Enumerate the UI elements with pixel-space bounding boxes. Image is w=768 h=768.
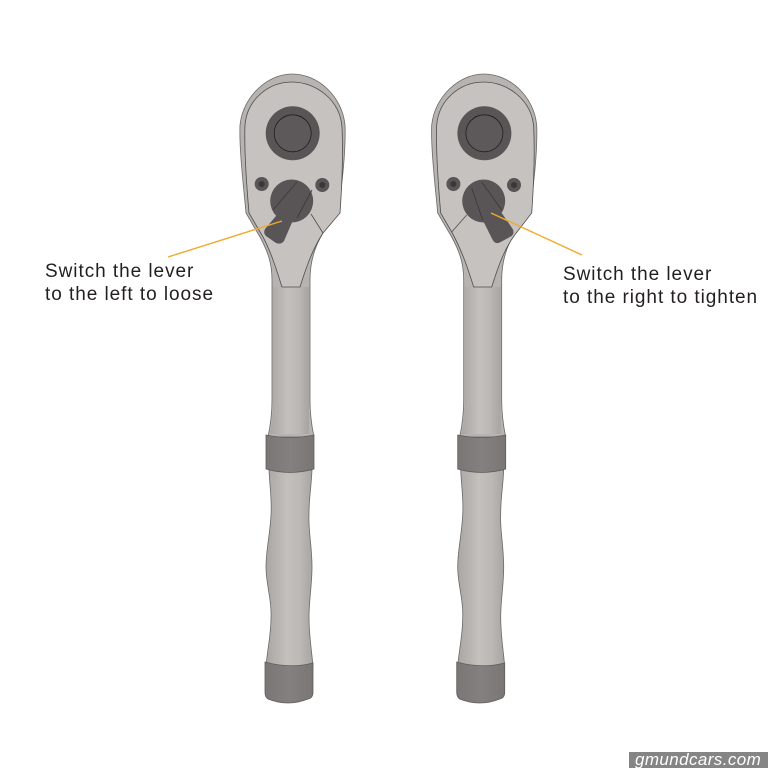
grip collar bbox=[266, 435, 314, 472]
handle grip bbox=[458, 470, 505, 666]
right ratchet wrench bbox=[432, 74, 537, 703]
head and shaft body bbox=[432, 74, 537, 437]
head plate bbox=[245, 82, 342, 287]
plate seam bbox=[311, 214, 323, 233]
screw right bbox=[507, 178, 521, 192]
head plate bbox=[437, 82, 534, 287]
left caption: to the left to loose bbox=[45, 284, 214, 305]
left ratchet wrench bbox=[240, 74, 345, 703]
handle grip bbox=[266, 470, 313, 666]
lever pointing right bbox=[462, 180, 514, 243]
screw left bbox=[255, 177, 269, 191]
end cap bbox=[457, 662, 505, 703]
left callout line bbox=[168, 221, 282, 257]
head and shaft body bbox=[240, 74, 345, 437]
shaft highlight bbox=[270, 287, 309, 434]
socket drive bbox=[457, 106, 511, 160]
grip collar bbox=[458, 435, 506, 472]
right callout line bbox=[491, 213, 582, 255]
right caption: Switch the lever bbox=[563, 264, 712, 285]
end cap bbox=[265, 662, 313, 703]
right caption: to the right to tighten bbox=[563, 287, 758, 308]
plate seam bbox=[452, 215, 467, 232]
socket drive bbox=[266, 106, 320, 160]
lever pointing left bbox=[264, 180, 313, 244]
left caption: Switch the lever bbox=[45, 261, 194, 282]
screw right bbox=[315, 178, 329, 192]
shaft highlight bbox=[462, 287, 501, 434]
screw left bbox=[446, 177, 460, 191]
